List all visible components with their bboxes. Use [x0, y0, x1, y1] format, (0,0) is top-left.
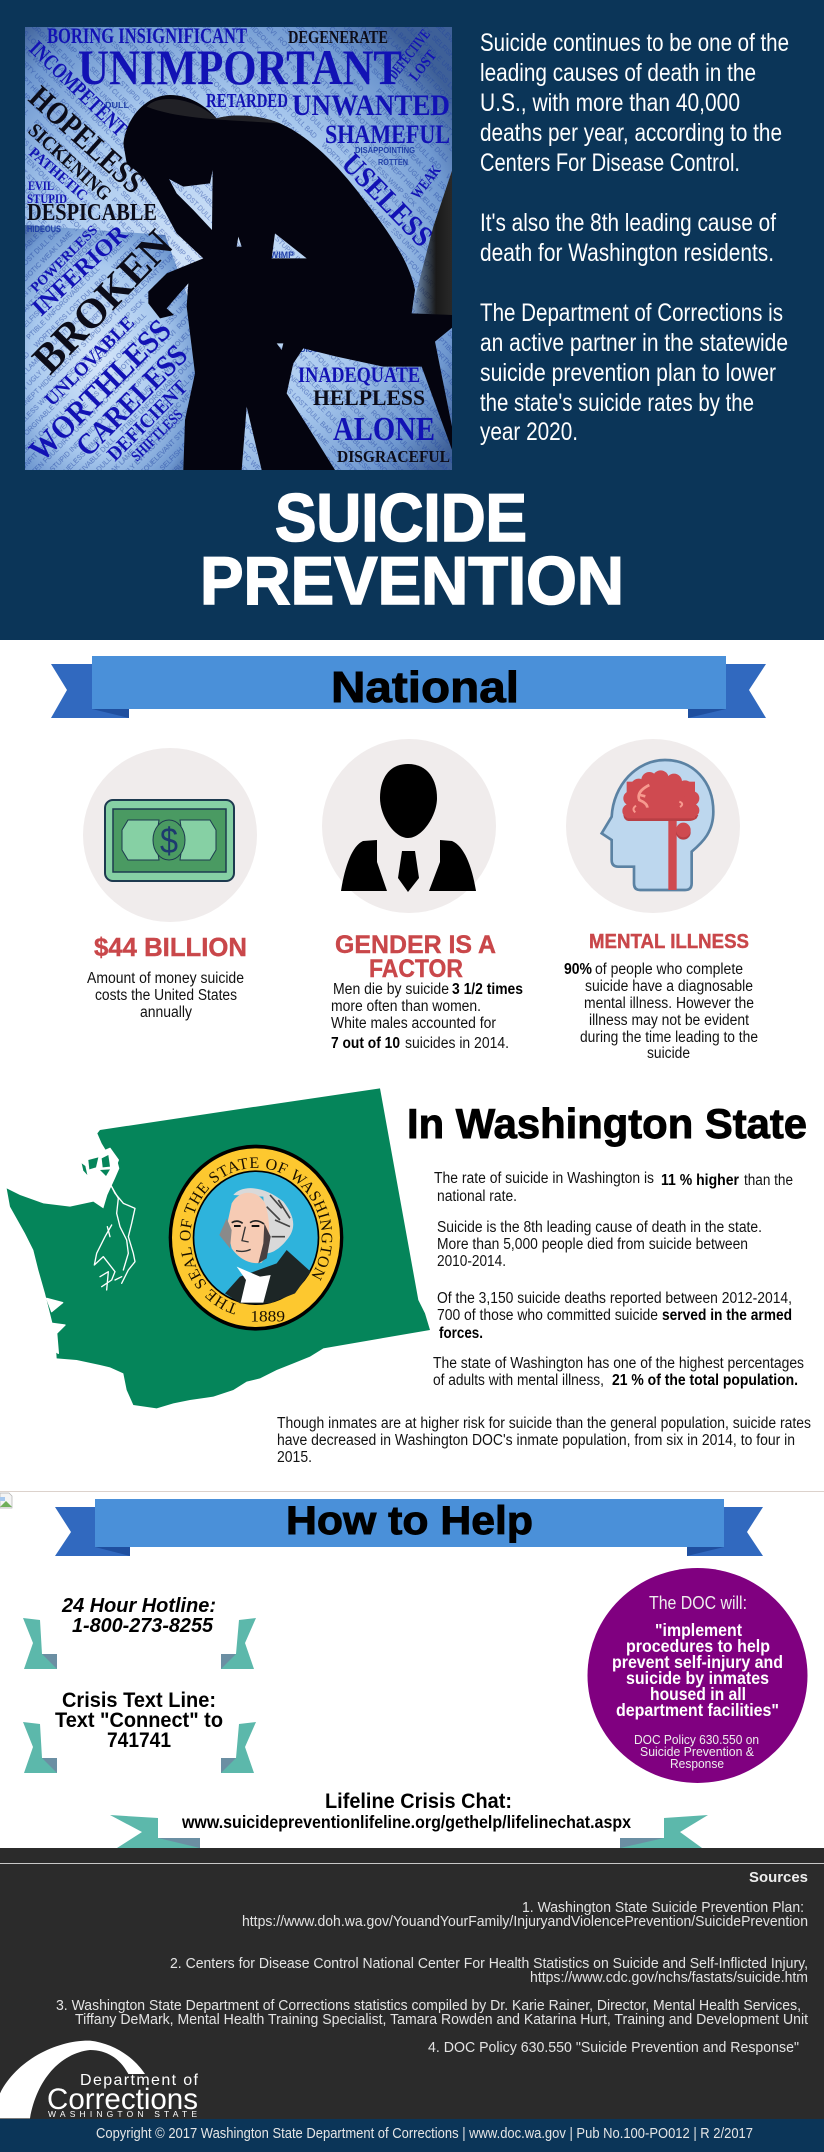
seal: 1889: [250, 1308, 285, 1325]
stat: $44 billion: costs the United States: [95, 987, 237, 1004]
text: Washington facts: 2010-2014.: [437, 1253, 506, 1270]
stat: mental illness: [564, 931, 758, 1062]
sources: 1. Washington State Suicide Prevention Plan:: [522, 1899, 804, 1916]
sources: Sources: [749, 1869, 808, 1886]
word cloud terms: STUPID: [27, 191, 67, 206]
word cloud terms: INCOMPETENT: [25, 36, 133, 141]
text: inmates note: 2015.: [277, 1449, 312, 1466]
callout: DOC policy circle: Response: [670, 1756, 724, 1771]
stat: gender is a factor: 3 1/2 times: [452, 981, 523, 998]
map: Washington state with seal: [6, 1088, 430, 1408]
intro text: [480, 29, 789, 446]
sources: 4. DOC Policy 630.550 "Suicide Prevention and Response": [428, 2039, 799, 2056]
word cloud terms: ROTTEN: [378, 158, 408, 167]
logo: Department of Corrections: Department of: [80, 2072, 199, 2089]
banner: How to Help: How to Help: [286, 1499, 533, 1543]
panel: copyright bar: [0, 2119, 824, 2152]
stat: mental illness: MENTAL ILLNESS: [589, 931, 749, 953]
word cloud terms: [21, 23, 450, 468]
stat: gender is a factor: 7 out of 10: [331, 1035, 400, 1052]
intro text: year 2020.: [480, 418, 578, 446]
text: inmates note: [277, 1415, 811, 1466]
text: Washington facts: of adults with mental illness,: [433, 1372, 604, 1389]
panel: footer background: [0, 1848, 824, 2119]
banner: National: National: [331, 663, 519, 712]
word cloud terms: DEFICIENT: [103, 376, 193, 466]
word cloud terms: HOPELESS: [22, 78, 152, 200]
stat: mental illness: illness may not be evident: [589, 1012, 750, 1029]
word cloud terms: SICKENING: [24, 119, 116, 206]
word cloud terms: DISAPPOINTING: [355, 146, 415, 155]
logo: Department of Corrections: [0, 2041, 199, 2119]
text: Washington facts: served in the armed: [662, 1307, 792, 1324]
icon: head and brain in circle: [566, 739, 740, 913]
stat: gender is a factor: suicides in 2014.: [405, 1035, 509, 1052]
callout: DOC policy circle: housed in all: [650, 1684, 746, 1704]
word cloud terms: DEGENERATE: [288, 27, 388, 47]
stat: gender is a factor: White males accounted for: [331, 1015, 496, 1032]
text: Washington facts: forces.: [439, 1325, 483, 1342]
sources: https://www.cdc.gov/nchs/fastats/suicide.htm: [530, 1969, 808, 1986]
word cloud terms: POWERLESS: [28, 223, 101, 296]
callout: DOC policy circle: suicide by inmates: [626, 1668, 769, 1688]
word cloud terms: WIMP: [270, 250, 294, 260]
intro text: death for Washington residents.: [480, 239, 774, 267]
stat: gender is a factor: FACTOR: [369, 955, 463, 983]
panel: header background: [0, 0, 824, 640]
sources: [56, 1869, 809, 2056]
callout: DOC policy circle: The DOC will:: [649, 1593, 747, 1613]
silhouette: [123, 95, 453, 470]
stat: $44 billion: Amount of money suicide: [87, 970, 244, 987]
word cloud terms: EVIL: [28, 178, 54, 193]
banner: National: [51, 656, 766, 718]
word cloud terms: INFERIOR: [27, 220, 133, 321]
crisis text line callout: Crisis Text Line:: [62, 1689, 216, 1712]
banner: How to Help: [55, 1499, 763, 1556]
word cloud terms: INADEQUATE: [298, 362, 420, 387]
word cloud terms: HIDEOUS: [27, 224, 61, 234]
stat: $44 billion: [87, 932, 247, 1021]
stat: gender is a factor: Men die by suicide: [333, 981, 449, 998]
stat: $44 billion: annually: [140, 1004, 192, 1021]
stat: gender is a factor: GENDER IS A: [335, 931, 496, 959]
icon: money in circle: $: [160, 820, 178, 861]
stat: gender is a factor: [331, 931, 523, 1052]
word cloud terms: PATHETIC: [25, 145, 90, 204]
text: Washington facts: 700 of those who committed suicide: [437, 1307, 658, 1324]
word cloud terms: UNWANTED: [292, 89, 450, 122]
callout: DOC policy circle: Suicide Prevention &: [640, 1744, 754, 1759]
logo: Department of Corrections: Corrections: [47, 2083, 198, 2116]
callout: DOC policy circle: "implement: [655, 1620, 742, 1640]
text: Washington facts: 11 % higher: [661, 1172, 739, 1189]
text: Washington facts: The rate of suicide in Washington is: [434, 1170, 654, 1187]
text: Washington facts: 21 % of the total population.: [612, 1372, 798, 1389]
word cloud terms: WORTHLESS: [21, 312, 178, 468]
hotline callout: 1-800-273-8255: [72, 1615, 214, 1637]
stat: mental illness: suicide: [647, 1045, 690, 1062]
intro text: leading causes of death in the: [480, 59, 756, 87]
text: Washington facts: [433, 1170, 804, 1389]
icon: broken image placeholder: [0, 1493, 12, 1508]
word cloud terms: SHAMEFUL: [325, 120, 450, 149]
stat: gender is a factor: more often than women.: [331, 998, 481, 1015]
title: SUICIDE: [275, 480, 527, 556]
lifeline crisis chat callout: Lifeline Crisis Chat:: [325, 1790, 512, 1813]
text: Washington facts: Of the 3,150 suicide deaths reported between 2012-2014,: [437, 1290, 792, 1307]
intro text: suicide prevention plan to lower: [480, 359, 776, 387]
stat: $44 billion: $44 BILLION: [94, 932, 247, 962]
crisis text line callout: 741741: [107, 1729, 171, 1752]
word cloud terms: USELESS: [335, 147, 439, 253]
word cloud terms: LOST: [407, 48, 440, 84]
stat: mental illness: mental illness. However the: [584, 995, 754, 1012]
word cloud terms: UNIMPORTANT: [78, 39, 402, 95]
seal: THE SEAL OF THE STATE OF WASHINGTON: [180, 1157, 332, 1314]
title: PREVENTION: [200, 543, 624, 619]
title: [200, 480, 624, 619]
intro text: the state's suicide rates by the: [480, 389, 754, 417]
word cloud terms: DISGUSTING: [300, 345, 348, 354]
word cloud terms: DEFECTIVE: [386, 27, 434, 82]
lifeline crisis chat callout: www.suicidepreventionlifeline.org/gethelp/lifelinechat.aspx: [181, 1812, 631, 1832]
stat: mental illness: suicide have a diagnosable: [585, 978, 753, 995]
stat: mental illness: of people who complete: [595, 961, 743, 978]
word cloud terms: BORING INSIGNIFICANT: [47, 23, 247, 48]
word cloud terms: RETARDED: [206, 90, 288, 112]
text: Washington facts: than the: [744, 1172, 793, 1189]
portrait: [219, 1188, 311, 1303]
icon: businessman in circle: [322, 739, 496, 913]
puget sound: [47, 1148, 135, 1353]
image: silhouette over word cloud: [21, 23, 453, 470]
hotline callout: 24 Hour Hotline:: [61, 1595, 216, 1617]
word cloud terms: BROKEN: [24, 222, 182, 383]
word cloud terms: UNLOVABLE: [41, 312, 139, 411]
word cloud terms: DULL: [105, 101, 129, 110]
callout: DOC policy circle: department facilities": [616, 1700, 779, 1720]
text: Washington facts: More than 5,000 people died from suicide between: [437, 1236, 748, 1253]
icon: money in circle: [83, 748, 257, 922]
text: Washington facts: national rate.: [437, 1188, 517, 1205]
text: Washington facts: Suicide is the 8th leading cause of death in the state.: [437, 1219, 762, 1236]
callout: DOC policy circle: prevent self-injury and: [612, 1652, 783, 1672]
callout: DOC policy circle: procedures to help: [626, 1636, 770, 1656]
word cloud terms: SHIFTLESS: [129, 407, 186, 465]
crisis text line callout: Text "Connect" to: [55, 1709, 223, 1732]
heading: In Washington State: In Washington State: [407, 1100, 807, 1147]
word cloud terms: ALONE: [333, 411, 435, 448]
word cloud terms: DESPICABLE: [27, 200, 157, 226]
intro text: Centers For Disease Control.: [480, 149, 740, 177]
logo: Department of Corrections: WASHINGTON STATE: [48, 2109, 197, 2119]
word cloud terms: HELPLESS: [313, 385, 425, 410]
lifeline crisis chat callout: [110, 1790, 708, 1848]
callout: DOC policy circle: DOC Policy 630.550 on: [634, 1732, 759, 1747]
word cloud terms: WEAK: [409, 162, 445, 202]
word cloud terms: DISGRACEFUL: [337, 447, 450, 466]
stat: mental illness: 90%: [564, 961, 592, 978]
stat: mental illness: during the time leading to the: [580, 1029, 758, 1046]
word cloud terms: CARELESS: [70, 338, 194, 463]
hotline callout: [23, 1595, 256, 1669]
crisis text line callout: [23, 1689, 256, 1773]
callout: DOC policy circle: [588, 1568, 808, 1783]
intro text: U.S., with more than 40,000: [480, 89, 740, 117]
